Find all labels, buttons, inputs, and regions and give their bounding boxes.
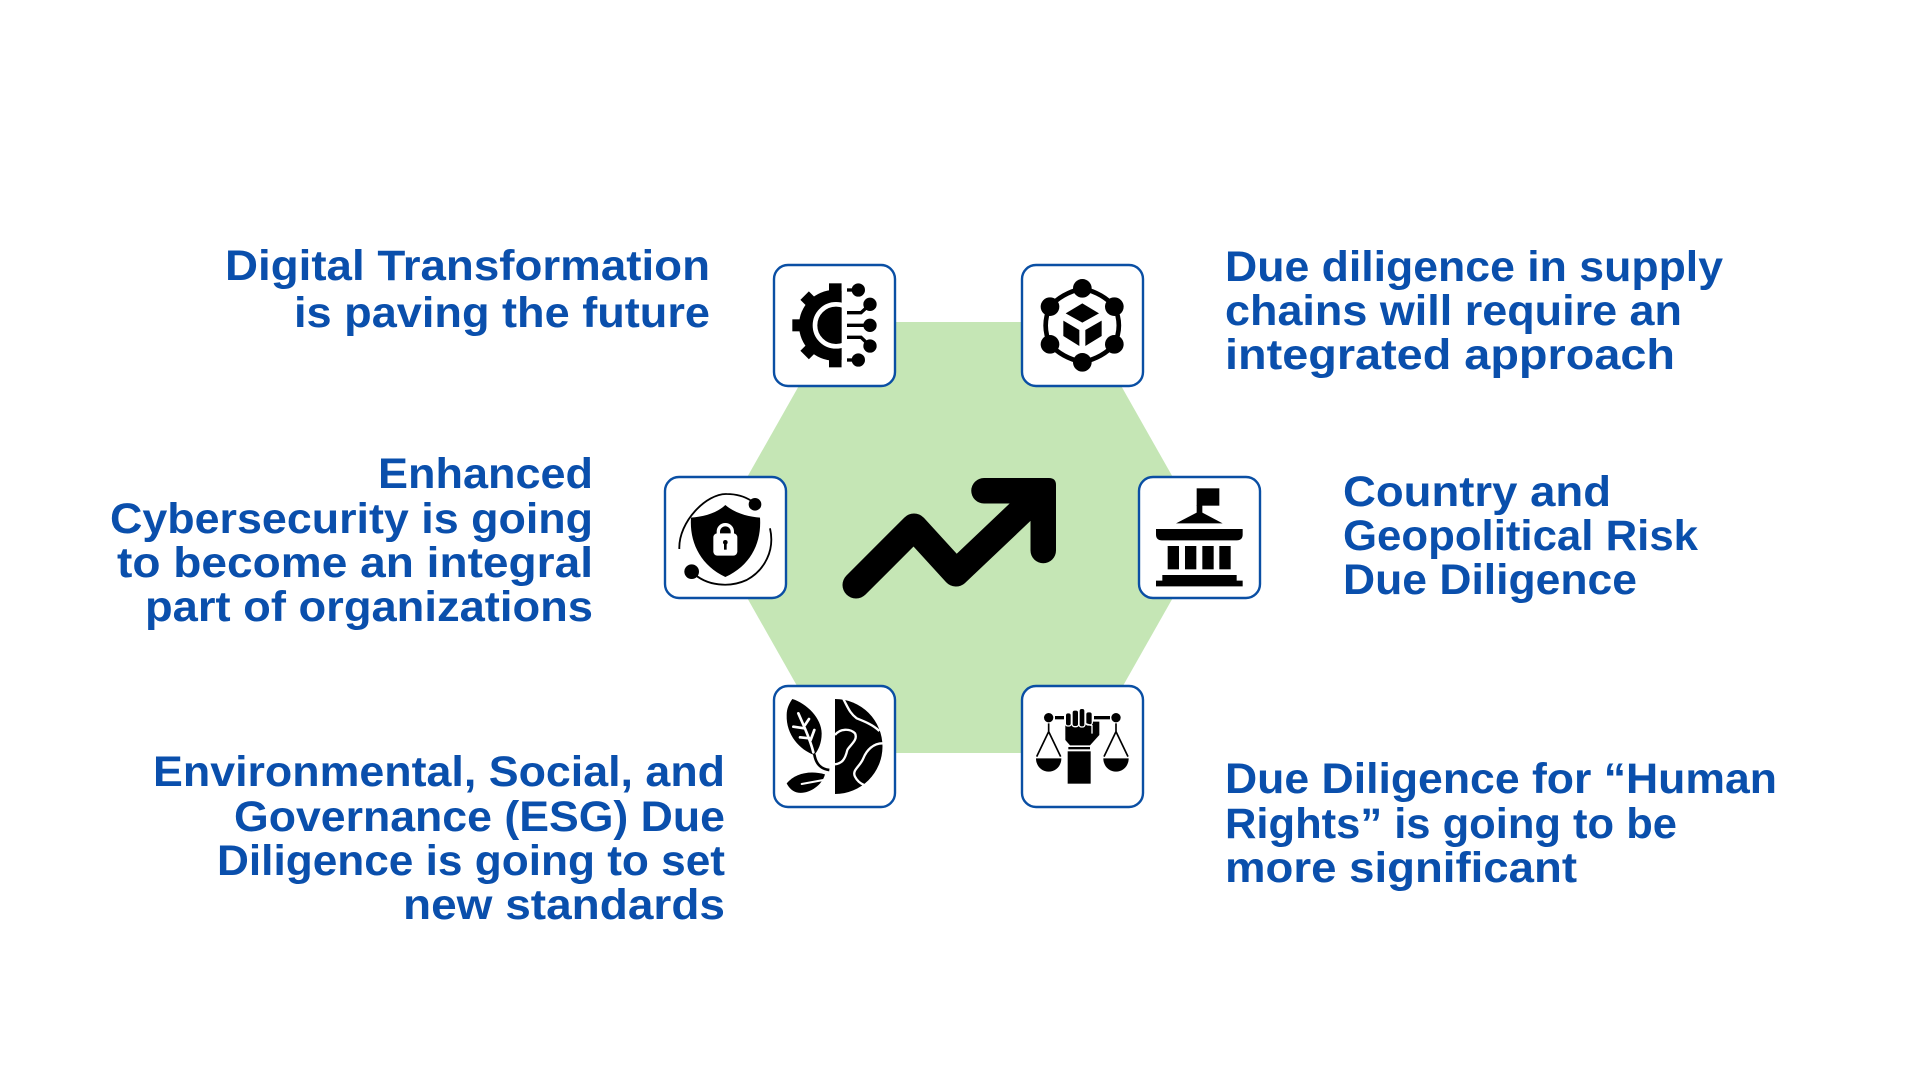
icon: central upward trend arrow bbox=[856, 478, 1056, 585]
text: enhanced cybersecurity: to become an integral bbox=[117, 539, 593, 587]
card frame bbox=[665, 477, 786, 598]
text: enhanced cybersecurity bbox=[110, 450, 593, 631]
text: supply chains due diligence: chains will require an bbox=[1225, 287, 1682, 335]
icon: shield with padlock bbox=[679, 494, 771, 585]
icon: fist holding balance scales bbox=[1036, 708, 1129, 784]
text: digital transformation bbox=[225, 242, 710, 337]
card frame bbox=[774, 265, 895, 386]
text: ESG due diligence: Environmental, Social, and bbox=[153, 748, 725, 796]
icon: leaves and half globe bbox=[787, 699, 883, 794]
text: country and geopolitical risk: Due Diligence bbox=[1343, 556, 1637, 604]
text: digital transformation: Digital Transformation bbox=[225, 242, 710, 290]
text: enhanced cybersecurity: part of organizations bbox=[145, 583, 593, 631]
text: ESG due diligence bbox=[153, 748, 725, 929]
text: ESG due diligence: Governance (ESG) Due bbox=[234, 793, 725, 841]
text: supply chains due diligence bbox=[1225, 243, 1723, 379]
text: human rights due diligence bbox=[1225, 755, 1777, 892]
icon: cube network bbox=[1041, 279, 1124, 372]
text: ESG due diligence: Diligence is going to set bbox=[217, 837, 725, 885]
text: supply chains due diligence: Due diligence in supply bbox=[1225, 243, 1723, 291]
green central hexagon bbox=[713, 322, 1207, 753]
text: enhanced cybersecurity: Cybersecurity is going bbox=[110, 495, 593, 543]
text: human rights due diligence: more significant bbox=[1225, 844, 1577, 892]
text: country and geopolitical risk: Country and bbox=[1343, 468, 1611, 516]
text: human rights due diligence: Due Diligence for “Human bbox=[1225, 755, 1777, 803]
text: supply chains due diligence: integrated approach bbox=[1225, 331, 1675, 379]
text: digital transformation: is paving the future bbox=[294, 289, 710, 337]
icon: government building with flag bbox=[1156, 488, 1243, 586]
icon: half gear with circuit lines bbox=[792, 280, 878, 371]
text: country and geopolitical risk bbox=[1343, 468, 1698, 604]
text: country and geopolitical risk: Geopolitical Risk bbox=[1343, 512, 1698, 560]
card: cybersecurity bbox=[665, 477, 786, 598]
card: human rights bbox=[1022, 686, 1143, 807]
card frame bbox=[1022, 686, 1143, 807]
card frame bbox=[774, 686, 895, 807]
card: country and geopolitical risk bbox=[1139, 477, 1260, 598]
card frame bbox=[1139, 477, 1260, 598]
card: ESG bbox=[774, 686, 895, 807]
text: ESG due diligence: new standards bbox=[403, 881, 725, 929]
text: enhanced cybersecurity: Enhanced bbox=[378, 450, 593, 498]
text: human rights due diligence: Rights” is going to be bbox=[1225, 800, 1677, 848]
card: supply chains bbox=[1022, 265, 1143, 386]
card frame bbox=[1022, 265, 1143, 386]
card: digital transformation bbox=[774, 265, 895, 386]
